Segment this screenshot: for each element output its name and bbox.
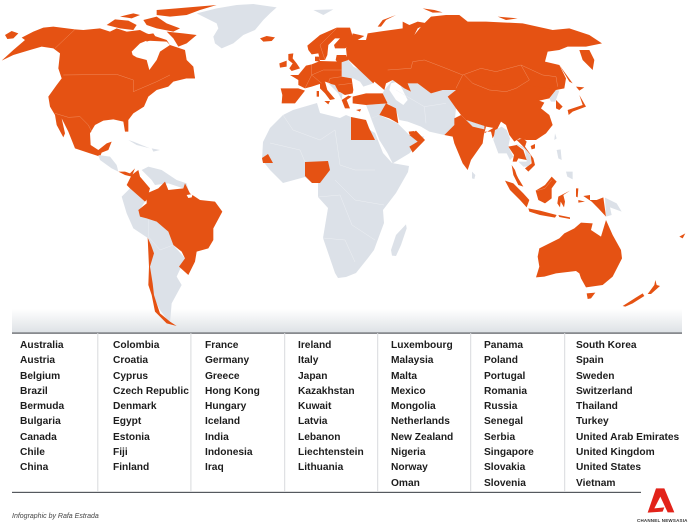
country list column 2: Finland bbox=[113, 462, 149, 473]
Iraq bbox=[379, 103, 398, 123]
country list column 6: Serbia bbox=[484, 432, 515, 443]
South America bbox=[122, 170, 222, 326]
country list column 3: Iraq bbox=[205, 462, 224, 473]
country list column 6: Slovakia bbox=[484, 462, 525, 473]
North Korea bbox=[549, 90, 559, 102]
country list column 2: Estonia bbox=[113, 432, 150, 443]
country list column 5: Luxembourg bbox=[391, 340, 453, 351]
Arabian Peninsula bbox=[371, 115, 424, 163]
Greenland and Svalbard bbox=[197, 4, 333, 48]
country list column 5: Mongolia bbox=[391, 401, 436, 412]
country list column 4: Kazakhstan bbox=[298, 386, 355, 397]
country list column 6: Slovenia bbox=[484, 478, 526, 489]
China bbox=[448, 83, 556, 142]
country list column 4: Lebanon bbox=[298, 432, 340, 443]
country list column 2: Cyprus bbox=[113, 371, 148, 382]
United Arab Emirates and Kuwait bbox=[409, 131, 414, 134]
country list column 2: Croatia bbox=[113, 355, 148, 366]
country list column 7 bbox=[576, 340, 679, 489]
country list column 4: Kuwait bbox=[298, 401, 331, 412]
credit line: Infographic by Rafa Estrada bbox=[12, 513, 99, 520]
country list column 4: Liechtenstein bbox=[298, 447, 364, 458]
country list column 2: Fiji bbox=[113, 447, 128, 458]
country list column 3 bbox=[205, 340, 260, 473]
country list column 6: Poland bbox=[484, 355, 518, 366]
North America bbox=[2, 5, 275, 157]
Sakhalin and Kamchatka bbox=[559, 65, 573, 83]
country list column 5: Malta bbox=[391, 371, 417, 382]
country list column 1: China bbox=[20, 462, 48, 473]
Cyprus bbox=[356, 109, 361, 112]
Arctic islands bbox=[378, 15, 396, 27]
country list column 1: Austria bbox=[20, 355, 55, 366]
country list column 5: Norway bbox=[391, 462, 428, 473]
country list column 7: United Kingdom bbox=[576, 447, 655, 458]
country list column 3: Iceland bbox=[205, 416, 240, 427]
country list column 2: Colombia bbox=[113, 340, 159, 351]
Southeast Asia bbox=[493, 127, 622, 219]
country list column 6: Romania bbox=[484, 386, 527, 397]
country list column 5: Mexico bbox=[391, 386, 426, 397]
Oman bbox=[409, 131, 425, 153]
country list column 6: Russia bbox=[484, 401, 517, 412]
country list column 4 bbox=[298, 340, 364, 473]
Europe bbox=[279, 28, 373, 108]
country list column 7: Switzerland bbox=[576, 386, 633, 397]
country list column 2 bbox=[113, 340, 189, 473]
country list column 3: Hong Kong bbox=[205, 386, 260, 397]
Central and northern South America bbox=[98, 140, 188, 190]
icon: Channel NewsAsia logo bbox=[648, 488, 674, 513]
country list column 6: Portugal bbox=[484, 371, 525, 382]
country list column 3: Greece bbox=[205, 371, 240, 382]
country list column 2: Egypt bbox=[113, 416, 141, 427]
Middle East and Central Asia bbox=[383, 80, 456, 135]
country list column 4: Lithuania bbox=[298, 462, 343, 473]
country list column 6 bbox=[484, 340, 534, 489]
country list column 6: Singapore bbox=[484, 447, 534, 458]
country list column 5: Netherlands bbox=[391, 416, 450, 427]
Levant bbox=[366, 103, 388, 118]
antarctic fade band bbox=[12, 309, 682, 333]
country list column 5: Malaysia bbox=[391, 355, 433, 366]
country list column 1: Bulgaria bbox=[20, 416, 61, 427]
country list column 4: Japan bbox=[298, 371, 327, 382]
country list column 3: Hungary bbox=[205, 401, 246, 412]
country list column 1: Brazil bbox=[20, 386, 48, 397]
country list column 7: Spain bbox=[576, 355, 604, 366]
country list column 2: Denmark bbox=[113, 401, 157, 412]
country list column 5 bbox=[391, 340, 453, 489]
Caspian Sea bbox=[389, 81, 408, 105]
Turkey bbox=[353, 93, 388, 105]
Nepal bbox=[466, 120, 484, 129]
Australia and New Zealand bbox=[536, 220, 685, 307]
Africa bbox=[262, 103, 409, 278]
country list column 7: United States bbox=[576, 462, 641, 473]
country list column 5: Oman bbox=[391, 478, 420, 489]
country list column 1: Chile bbox=[20, 447, 45, 458]
country list column 6: Senegal bbox=[484, 416, 523, 427]
country list column 2: Czech Republic bbox=[113, 386, 189, 397]
South Korea bbox=[556, 100, 563, 110]
Japan bbox=[568, 95, 586, 115]
Madagascar and Sri Lanka bbox=[391, 172, 475, 256]
country list column 4: Italy bbox=[298, 355, 318, 366]
country list column 1: Belgium bbox=[20, 371, 60, 382]
Asia bbox=[346, 8, 602, 170]
table rules bbox=[12, 332, 682, 493]
Egypt, Nigeria and Senegal bbox=[262, 117, 375, 183]
country list column 1: Bermuda bbox=[20, 401, 64, 412]
country list column 3: France bbox=[205, 340, 238, 351]
country list column 7: Turkey bbox=[576, 416, 609, 427]
country list column 5: New Zealand bbox=[391, 432, 453, 443]
country list column 7: South Korea bbox=[576, 340, 637, 351]
country list column 1: Australia bbox=[20, 340, 64, 351]
logo wordmark: CHANNEL NEWSASIA bbox=[637, 518, 688, 522]
country list column 4: Latvia bbox=[298, 416, 327, 427]
country list column 1 bbox=[20, 340, 64, 473]
country list column 7: Thailand bbox=[576, 401, 618, 412]
country list column 7: Vietnam bbox=[576, 478, 615, 489]
India bbox=[444, 115, 501, 170]
country list column 3: Germany bbox=[205, 355, 249, 366]
country list column 5: Nigeria bbox=[391, 447, 426, 458]
country list column 4: Ireland bbox=[298, 340, 331, 351]
Russia and Kazakhstan bbox=[346, 15, 602, 107]
country list column 3: Indonesia bbox=[205, 447, 253, 458]
country list column 1: Canada bbox=[20, 432, 57, 443]
country list column 3: India bbox=[205, 432, 229, 443]
country list column 7: United Arab Emirates bbox=[576, 432, 679, 443]
country list column 7: Sweden bbox=[576, 371, 614, 382]
country list column 6: Panama bbox=[484, 340, 523, 351]
